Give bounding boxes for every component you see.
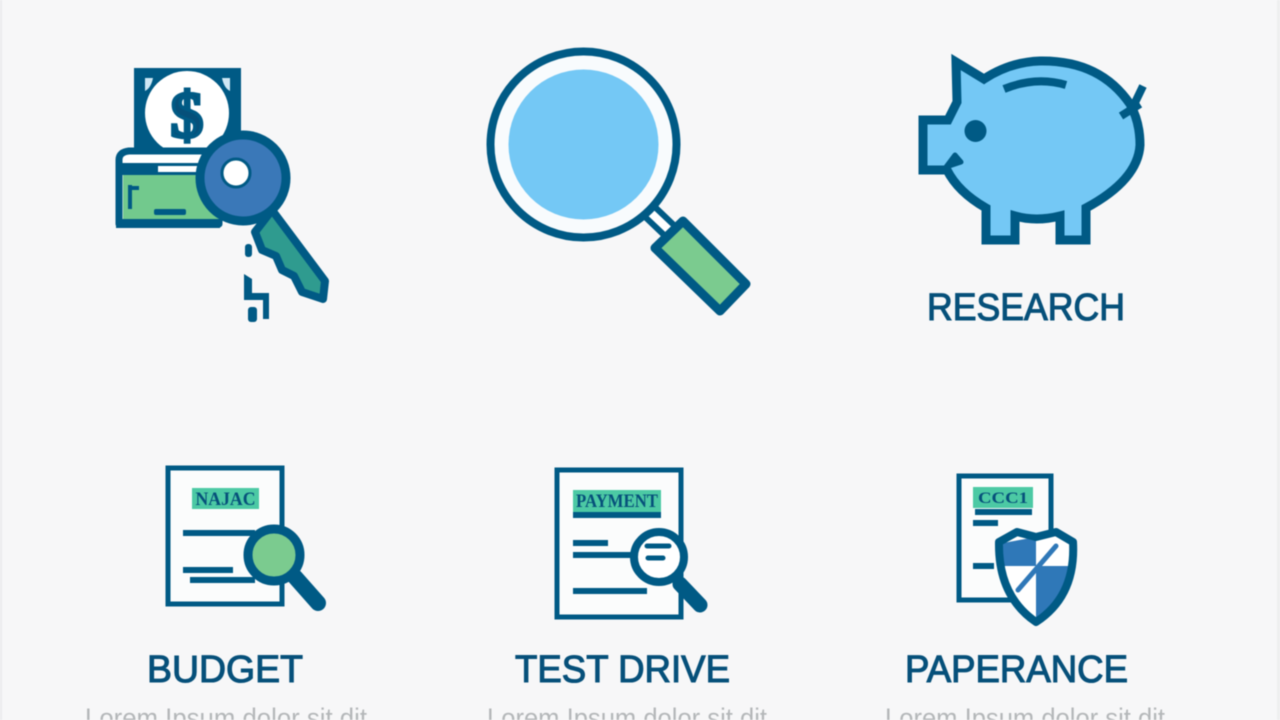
key xyxy=(200,135,325,299)
wallet xyxy=(116,151,220,228)
pig body xyxy=(923,61,1140,240)
page xyxy=(168,468,282,604)
magnifier handle xyxy=(295,577,318,603)
document label: PAYMENT xyxy=(576,491,658,512)
text lines xyxy=(573,515,661,591)
heading: paperance: PAPERANCE xyxy=(905,649,1128,691)
key fragments xyxy=(244,244,269,322)
handle neck xyxy=(648,210,671,232)
handle xyxy=(655,221,746,311)
mouth xyxy=(946,155,961,167)
lens xyxy=(634,532,684,582)
eye xyxy=(964,120,986,142)
page xyxy=(959,476,1051,600)
icon: test drive document xyxy=(557,470,700,617)
banknote xyxy=(138,71,237,164)
text lines xyxy=(973,512,1032,566)
heading: test drive: TEST DRIVE xyxy=(515,649,730,691)
icon: piggy bank xyxy=(923,61,1143,240)
icon: budget document xyxy=(168,468,318,604)
text lines xyxy=(183,533,255,580)
coin slot xyxy=(1004,81,1066,89)
document label: NAJAC xyxy=(196,489,256,510)
tail xyxy=(1121,86,1143,116)
shield xyxy=(999,532,1073,622)
dollar sign: $ xyxy=(170,79,204,152)
heading: budget: BUDGET xyxy=(147,649,303,691)
document label: CCC1 xyxy=(978,490,1028,507)
page xyxy=(557,470,681,617)
icon: money and key xyxy=(116,71,325,322)
lens xyxy=(508,70,658,220)
document label xyxy=(973,487,1033,508)
icon: paperance document with shield xyxy=(959,476,1073,622)
icon: magnifying glass xyxy=(490,52,746,311)
green lens xyxy=(248,529,300,581)
lens ring xyxy=(490,52,676,238)
heading: research: RESEARCH xyxy=(927,287,1125,329)
magnifier handle xyxy=(680,584,700,605)
